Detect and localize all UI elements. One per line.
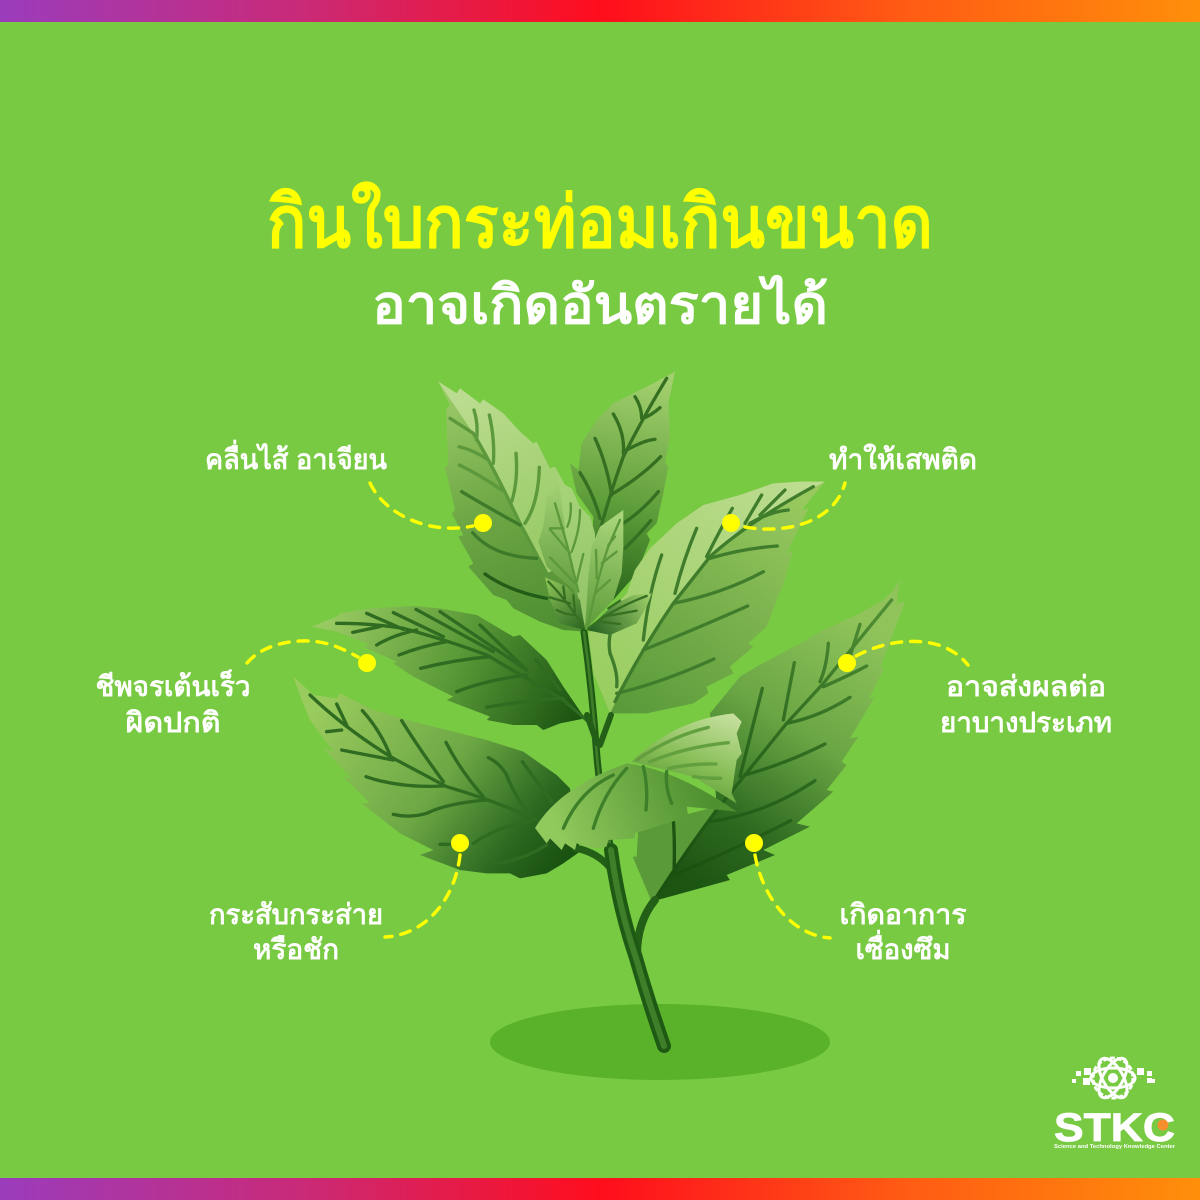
callout: restlessness or seizures: หรือชัก bbox=[253, 934, 339, 965]
leaf: top right bbox=[570, 372, 675, 627]
bud leaf: lower left bbox=[545, 577, 585, 630]
callout: drug interactions bbox=[838, 641, 1112, 738]
title: กินใบกระท่อมเกินขนาด bbox=[267, 180, 933, 263]
ground shadow bbox=[490, 1004, 830, 1080]
leaf: top left bbox=[438, 382, 585, 632]
callout: drowsiness bbox=[745, 834, 966, 965]
callout: addiction: ทำให้เสพติด bbox=[829, 443, 977, 475]
plant illustration bbox=[293, 372, 905, 1046]
bud leaves at top bbox=[538, 475, 652, 635]
subtitle: อาจเกิดอันตรายได้ bbox=[372, 274, 828, 335]
plant stem bbox=[575, 632, 664, 1046]
callout: abnormal heartbeat: ชีพจรเต้นเร็ว bbox=[96, 669, 250, 702]
logo dot bbox=[1158, 1120, 1168, 1130]
callout: drowsiness: เซื่องซึม bbox=[856, 929, 950, 965]
callout: nausea and vomiting bbox=[205, 439, 492, 532]
callout: abnormal heartbeat bbox=[96, 641, 376, 738]
logo wordmark: STKC bbox=[1054, 1106, 1175, 1150]
leaf: lower left bbox=[293, 677, 580, 878]
callout: restlessness or seizures bbox=[209, 834, 469, 965]
logo icon: atom bbox=[1072, 1054, 1155, 1102]
leaf: upper right bbox=[588, 482, 825, 713]
bud leaf: lower right bbox=[587, 593, 652, 635]
folded leaf: back bbox=[632, 713, 742, 803]
bud leaf: centre right bbox=[585, 510, 623, 630]
folded leaf: front bbox=[535, 763, 737, 850]
bottom gradient bar bbox=[0, 1178, 1200, 1200]
logo: STKC bbox=[1054, 1054, 1176, 1150]
callout: addiction bbox=[722, 443, 977, 532]
callout: drug interactions: ยาบางประเภท bbox=[940, 707, 1112, 738]
callout: drowsiness: เกิดอาการ bbox=[840, 899, 966, 930]
callout: nausea and vomiting: คลื่นไส้ อาเจียน bbox=[205, 439, 387, 475]
logo tagline: Science and Technology Knowledge Center bbox=[1054, 1144, 1176, 1150]
top gradient bar bbox=[0, 0, 1200, 22]
callout: abnormal heartbeat: ผิดปกติ bbox=[125, 707, 220, 738]
leaf: lower right bbox=[633, 580, 905, 902]
callout: restlessness or seizures: กระสับกระส่าย bbox=[209, 899, 383, 930]
leaf: middle left bbox=[312, 606, 588, 730]
callout: drug interactions: อาจส่งผลต่อ bbox=[946, 671, 1106, 702]
bud leaf: centre left bbox=[538, 475, 595, 630]
